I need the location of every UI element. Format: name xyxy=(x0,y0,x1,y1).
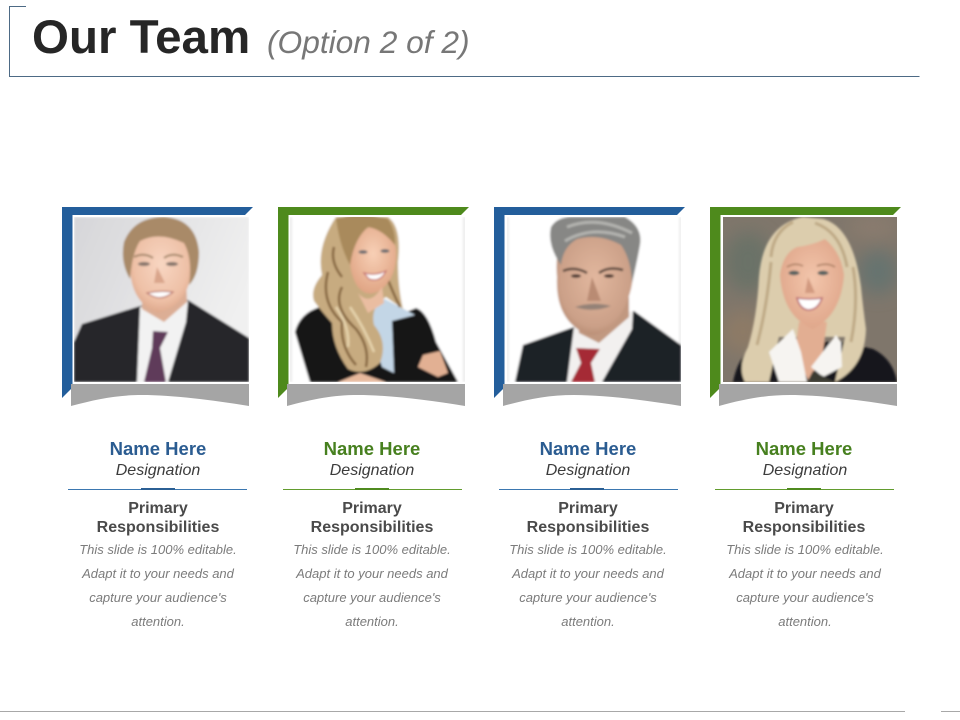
responsibilities heading: Responsibilities xyxy=(311,519,433,536)
responsibilities heading xyxy=(743,500,865,536)
responsibilities heading xyxy=(527,500,649,536)
title: Our Team xyxy=(32,11,250,64)
responsibilities heading: Primary xyxy=(128,500,188,517)
divider accent xyxy=(355,488,389,490)
body text xyxy=(509,542,667,629)
name: Name Here xyxy=(324,438,420,459)
title frame xyxy=(9,6,920,77)
footer line xyxy=(0,711,960,712)
body text: attention. xyxy=(778,614,832,629)
divider accent xyxy=(141,488,175,490)
panel: team member 2 xyxy=(278,207,469,629)
body text: This slide is 100% editable. xyxy=(509,542,667,557)
divider xyxy=(283,489,462,490)
body text xyxy=(79,542,237,629)
designation: Designation xyxy=(116,462,200,479)
divider xyxy=(715,489,894,490)
divider accent xyxy=(787,488,821,490)
portrait: woman with long wavy hair and crossed arms xyxy=(290,217,465,382)
responsibilities heading xyxy=(311,500,433,536)
body text xyxy=(726,542,884,629)
responsibilities heading xyxy=(97,500,219,536)
body text xyxy=(293,542,451,629)
name: Name Here xyxy=(756,438,852,459)
designation: Designation xyxy=(763,462,847,479)
body text: capture your audience's xyxy=(736,590,874,605)
name: Name Here xyxy=(540,438,636,459)
frame and banner xyxy=(62,207,253,406)
responsibilities heading: Primary xyxy=(558,500,618,517)
portrait: grey-haired man with red tie xyxy=(507,217,681,382)
panel: team member 3 xyxy=(494,207,685,629)
designation: Designation xyxy=(546,462,630,479)
responsibilities heading: Primary xyxy=(774,500,834,517)
frame and banner xyxy=(278,207,469,406)
body text: Adapt it to your needs and xyxy=(729,566,881,581)
subtitle: (Option 2 of 2) xyxy=(267,24,470,60)
body text: capture your audience's xyxy=(519,590,657,605)
body text: Adapt it to your needs and xyxy=(296,566,448,581)
designation: Designation xyxy=(330,462,414,479)
responsibilities heading: Responsibilities xyxy=(97,519,219,536)
body text: attention. xyxy=(561,614,615,629)
body text: attention. xyxy=(345,614,399,629)
portrait: blonde woman on mottled backdrop xyxy=(723,217,897,382)
responsibilities heading: Responsibilities xyxy=(743,519,865,536)
body text: capture your audience's xyxy=(89,590,227,605)
divider xyxy=(499,489,678,490)
responsibilities heading: Primary xyxy=(342,500,402,517)
panel: team member 1 xyxy=(62,207,253,629)
body text: attention. xyxy=(131,614,185,629)
body text: This slide is 100% editable. xyxy=(293,542,451,557)
frame and banner xyxy=(494,207,685,406)
body text: capture your audience's xyxy=(303,590,441,605)
responsibilities heading: Responsibilities xyxy=(527,519,649,536)
name: Name Here xyxy=(110,438,206,459)
body text: Adapt it to your needs and xyxy=(82,566,234,581)
divider xyxy=(68,489,247,490)
panel: team member 4 xyxy=(710,207,901,629)
divider accent xyxy=(570,488,604,490)
body text: This slide is 100% editable. xyxy=(726,542,884,557)
body text: This slide is 100% editable. xyxy=(79,542,237,557)
body text: Adapt it to your needs and xyxy=(512,566,664,581)
portrait: man in dark suit with purple tie xyxy=(74,217,249,382)
frame and banner xyxy=(710,207,901,406)
